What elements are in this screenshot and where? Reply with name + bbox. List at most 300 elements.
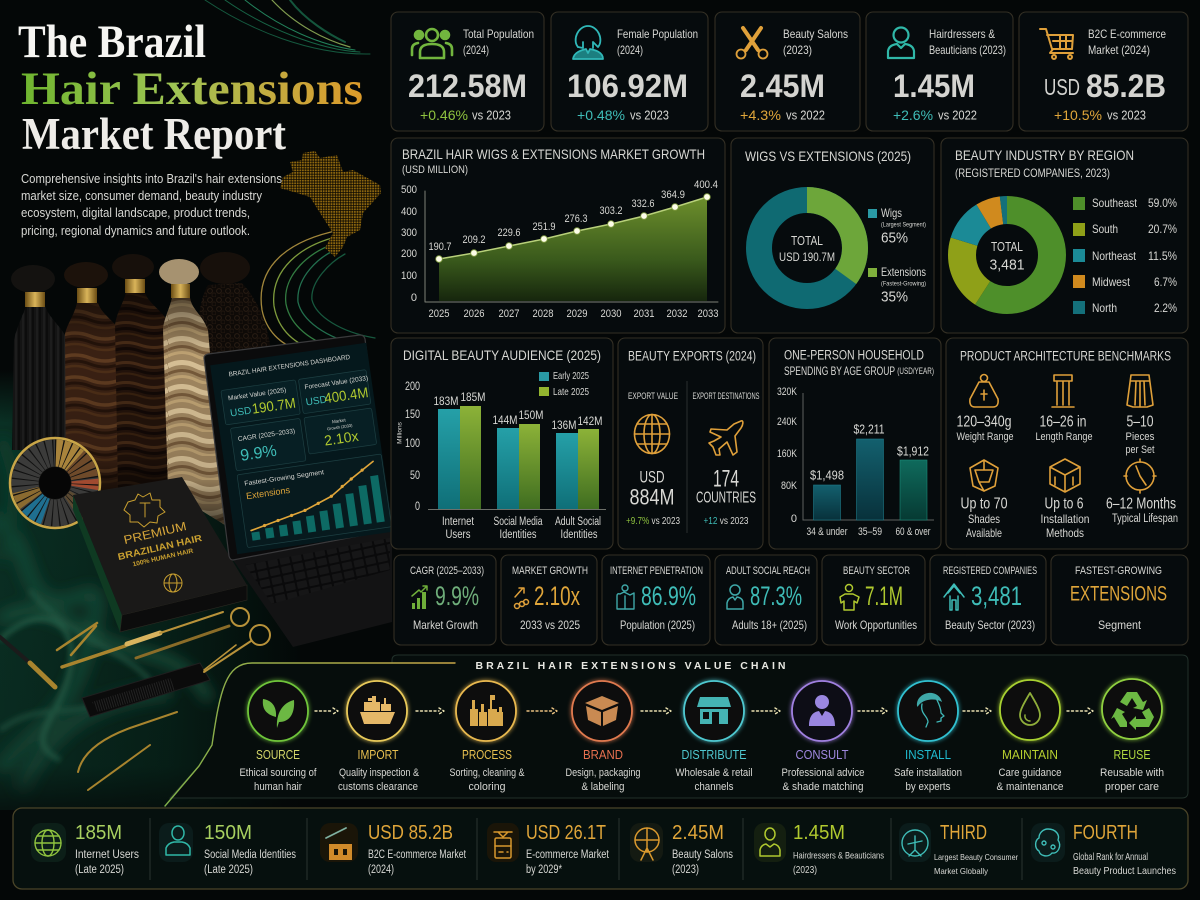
intro paragraph: market size, consumer demand, beauty industry (21, 189, 263, 203)
KPI: Total Population: vs 2023 (472, 108, 511, 122)
area chart: 200 (401, 248, 417, 260)
bar chart: 35–59 (858, 526, 882, 538)
area chart: 251.9 (532, 221, 556, 233)
step: brand: Design, packaging (566, 767, 640, 779)
laptop dashboard screen: Market (332, 417, 347, 424)
stat: beauty sector (822, 555, 925, 645)
panel: value chain (165, 655, 1188, 806)
bar chart: 160K (777, 448, 798, 460)
area chart: 209.2 (462, 234, 486, 246)
step: brand (566, 681, 640, 793)
arrow (752, 708, 780, 714)
arrow (641, 708, 671, 714)
panel: beauty industry by region: (REGISTERED COMPANIES, 2023) (955, 166, 1110, 180)
panel: one-person household: ONE-PERSON HOUSEHOLD (784, 348, 924, 362)
arrow (858, 708, 887, 714)
bar chart: Internet (442, 516, 475, 528)
icon: house (944, 584, 964, 610)
stat: B2C e-commerce market: B2C E-commerce Market (368, 849, 467, 861)
stat: market growth: MARKET GROWTH (512, 565, 588, 577)
benchmark text row 1: 120–340g (956, 414, 1012, 430)
stat: third largest consumer (899, 822, 1018, 876)
icon: growth bars (412, 586, 427, 609)
benchmark text row 2: Up to 70 (960, 496, 1008, 512)
bar chart: 80K (781, 480, 798, 492)
stat: beauty salons: 2.45M (672, 822, 724, 844)
KPI: Hairdressers & Beauticians: Hairdressers & (929, 27, 995, 41)
scissors (204, 625, 270, 672)
stat: market growth: 2.10x (534, 581, 580, 611)
bar chart: 240K (777, 416, 798, 428)
panel: beauty exports: BEAUTY EXPORTS (2024) (628, 348, 756, 364)
icon: worker (840, 584, 859, 610)
step: maintain: & maintenance (996, 781, 1064, 793)
stat: e-commerce market by 2029: E-commerce Market (526, 849, 610, 861)
KPI: Beauty Salons: (2023) (783, 43, 812, 57)
donut chart: TOTAL (791, 234, 823, 248)
donut legend: (Largest Segment) (881, 222, 926, 228)
stat: third largest consumer: THIRD (940, 822, 987, 844)
donut legend: (Fastest-Growing) (881, 280, 926, 288)
laptop dashboard screen: CAGR (2025–2033) (238, 428, 296, 443)
stat: registered companies: 3,481 (971, 581, 1022, 611)
bar chart: 34 & under (806, 526, 848, 538)
KPI: Beauty Salons: Beauty Salons (783, 27, 848, 41)
stat: social media identities: Social Media Identities (204, 849, 296, 861)
benchmark text row 2: Methods (1046, 526, 1084, 540)
arrow (527, 708, 557, 714)
stat: hairdressers and beauticians: Hairdressers & Beauticians (793, 850, 884, 862)
KPI: Female Population: +0.48% (577, 107, 625, 123)
area chart: 300 (401, 227, 417, 239)
benchmark text row 1: 5–10 (1126, 414, 1154, 430)
panel: value chain: BRAZIL HAIR EXTENSIONS VALUE CHAIN (476, 660, 786, 672)
intro paragraph: Comprehensive insights into Brazil's hair extensions (21, 172, 282, 186)
step: reuse: REUSE (1114, 748, 1150, 762)
stat: market growth (501, 555, 597, 645)
stat: fourth global rank: Global Rank for Annual (1073, 851, 1148, 863)
deep brown wavy bundle (112, 254, 175, 490)
step: install: INSTALL (905, 748, 951, 762)
bar chart: Social Media (494, 516, 543, 528)
laptop dashboard screen: Fastest-Growing Segment (244, 469, 325, 488)
KPI: B2C E-commerce: 85.2B (1086, 68, 1166, 104)
stat: internet users: Internet Users (75, 849, 139, 861)
colour swatch wheel (10, 438, 100, 528)
laptop dashboard screen: BRAZIL HAIR EXTENSIONS DASHBOARD (228, 354, 351, 379)
bar chart: 136M (552, 418, 576, 432)
stat: registered companies (930, 555, 1046, 645)
stat: internet users: 185M (75, 822, 122, 844)
stat: social media identities (159, 822, 296, 876)
step: reuse: proper care (1105, 781, 1159, 793)
KPI: Beauty Salons: 2.45M (740, 68, 825, 104)
stat: fastest-growing: Segment (1098, 618, 1142, 632)
area chart: 0 (411, 292, 417, 304)
arrow (963, 708, 991, 714)
stat: internet penetration (602, 555, 710, 645)
box emblem (124, 493, 165, 527)
bar chart: Millions (396, 421, 404, 444)
laptop dashboard screen: USD (305, 395, 328, 409)
step: consult: CONSULT (796, 748, 849, 762)
region legend: Northeast (1092, 249, 1137, 263)
benchmark text row 1: Weight Range (956, 431, 1014, 443)
stat: internet users: (Late 2025) (75, 864, 124, 876)
step: source (240, 681, 317, 793)
laptop dashboard screen: 2.10x (323, 429, 360, 450)
hair clip (57, 623, 97, 655)
gold tool one (62, 608, 249, 667)
icon: hairdresser (888, 28, 914, 58)
KPI: B2C E-commerce: B2C E-commerce (1088, 27, 1166, 41)
panel: beauty exports: USD (640, 468, 664, 486)
bar chart: Users (446, 529, 471, 541)
KPI: Beauty Salons: vs 2022 (786, 108, 825, 122)
bar chart: 144M (492, 413, 518, 427)
stat: CAGR: Market Growth (413, 618, 478, 632)
stat: adult social reach: Adults 18+ (2025) (732, 618, 807, 632)
bar chart: 60 & over (896, 526, 931, 538)
title: Market Report (22, 109, 286, 159)
area chart (401, 179, 718, 320)
region legend: North (1092, 301, 1117, 315)
area chart: 400 (401, 206, 417, 218)
benchmark text row 2 (960, 496, 1178, 540)
stat: registered companies: Beauty Sector (2023) (945, 618, 1035, 632)
step: maintain: Care guidance (998, 767, 1062, 779)
stat: market growth: 2033 vs 2025 (520, 618, 580, 632)
area chart: 229.6 (498, 227, 520, 239)
bar chart (396, 381, 606, 541)
benchmark text row 2: Up to 6 (1044, 496, 1084, 512)
title (18, 16, 363, 159)
step: install (894, 681, 962, 793)
step: process: coloring (468, 781, 506, 793)
benchmark text row 2: Shades (968, 512, 1000, 526)
panel: beauty industry by region (941, 138, 1188, 333)
bar chart: 50 (410, 470, 420, 482)
step: source: Ethical sourcing of (240, 767, 317, 779)
area chart: 2025 (428, 308, 450, 320)
gold hair tools (0, 608, 270, 790)
benchmark text row 1: per Set (1126, 444, 1154, 456)
stat: internet penetration: Population (2025) (620, 618, 695, 632)
step: import: Quality inspection & (339, 767, 420, 779)
step: consult: Professional advice (782, 767, 864, 779)
bottom stats strip (13, 808, 1188, 889)
area chart: 276.3 (564, 213, 588, 225)
panel: beauty exports: EXPORT DESTINATIONS (692, 391, 760, 401)
stat: hairdressers and beauticians (754, 822, 884, 876)
laptop dashboard screen: USD (230, 405, 252, 419)
panel: digital beauty audience: DIGITAL BEAUTY AUDIENCE (2025) (403, 347, 601, 363)
donut legend: Extensions (881, 265, 926, 279)
region legend: South (1092, 222, 1118, 236)
stat: hairdressers and beauticians: 1.45M (793, 822, 845, 844)
panel: market growth chart: BRAZIL HAIR WIGS & EXTENSIONS MARKET GROWTH (402, 146, 705, 162)
donut chart: TOTAL (991, 240, 1023, 254)
title: The Brazil (18, 16, 206, 68)
panel: product architecture benchmarks (946, 338, 1188, 549)
stat: internet penetration: INTERNET PENETRATION (610, 565, 703, 577)
icon: shades gem (970, 460, 998, 491)
KPI: Hairdressers & Beauticians: vs 2022 (938, 108, 977, 122)
bar chart: $1,912 (897, 444, 929, 458)
KPI: B2C E-commerce: +10.5% (1054, 107, 1102, 123)
stat: B2C e-commerce market: (2024) (368, 864, 394, 876)
region legend: 2.2% (1154, 301, 1177, 315)
icon: pieces (1127, 375, 1153, 407)
step: source: human hair (254, 781, 302, 793)
icon: length columns (1052, 375, 1074, 407)
area chart: 2033 (698, 308, 718, 320)
stat: adult social reach (715, 555, 817, 645)
product box: PREMIUM (122, 519, 188, 547)
KPI: Total Population: +0.46% (420, 107, 468, 123)
step: process: Sorting, cleaning & (450, 767, 525, 779)
benchmark text row 1: Pieces (1126, 431, 1155, 443)
bar chart: 142M (578, 414, 602, 428)
legend (539, 370, 589, 398)
step: install: by experts (906, 781, 951, 793)
bar chart: $1,498 (810, 468, 844, 482)
donut chart (962, 210, 1052, 300)
area chart: 364.9 (661, 189, 685, 201)
step: reuse: Reusable with (1100, 767, 1164, 779)
stat: third largest consumer: Largest Beauty Consumer (934, 852, 1018, 862)
icon: globe (634, 414, 670, 454)
stat: third largest consumer: Market Globally (934, 866, 989, 876)
bar chart: 100 (405, 438, 420, 450)
laptop (204, 335, 393, 647)
stat: CAGR: CAGR (2025–2033) (410, 565, 484, 577)
step: source: SOURCE (256, 748, 300, 762)
benchmark text row 1: 16–26 in (1040, 414, 1086, 430)
icon: installation cube (1050, 459, 1080, 492)
panel: one-person household (769, 338, 941, 549)
bar chart: Identities (500, 529, 537, 541)
panel: market growth chart (391, 138, 725, 333)
area chart: 2027 (498, 308, 520, 320)
stat: fourth global rank: Beauty Product Launches (1073, 865, 1176, 877)
KPI: B2C E-commerce (1019, 12, 1188, 131)
intro paragraph: pricing, regional dynamics and future outlook. (21, 224, 250, 238)
donut legend (868, 206, 926, 306)
legend: Late 2025 (553, 386, 589, 398)
panel: beauty exports: 884M (630, 484, 674, 510)
icon: shopping cart (1040, 29, 1073, 59)
step: consult (782, 681, 864, 793)
donut legend: 35% (881, 288, 908, 306)
dark brown wavy bundle (64, 262, 125, 495)
step: process (450, 681, 525, 793)
area chart: 2029 (566, 308, 588, 320)
stat: beauty salons: (2023) (672, 864, 699, 876)
stat: fourth global rank (1031, 822, 1176, 877)
donut legend: Wigs (881, 206, 902, 220)
laptop dashboard screen: 400.4M (323, 385, 369, 407)
stat: e-commerce market by 2029 (487, 822, 610, 876)
area chart: 2028 (532, 308, 554, 320)
product box: 100% HUMAN HAIR (132, 548, 194, 568)
KPI: Beauty Salons: +4.3% (740, 107, 781, 123)
stat: beauty salons: Beauty Salons (672, 849, 733, 861)
stat: adult social reach: 87.3% (750, 581, 802, 611)
KPI: Female Population (551, 12, 708, 131)
laptop dashboard screen: 190.7M (251, 395, 297, 418)
step: brand: & labeling (582, 781, 624, 793)
step: import (338, 681, 420, 793)
bar chart: 200 (405, 381, 420, 393)
stat: adult social reach: ADULT SOCIAL REACH (726, 565, 810, 577)
decorative swirl lines top (205, 0, 370, 54)
region legend (1073, 196, 1177, 315)
icon: scissors (736, 28, 768, 58)
KPI: B2C E-commerce: Market (2024) (1088, 43, 1150, 57)
icon: clock (1124, 459, 1156, 493)
laptop dashboard screen: Growth (2033) (327, 423, 353, 431)
KPI: Female Population: vs 2023 (630, 108, 669, 122)
bar chart: 0 (791, 513, 797, 525)
product box: BRAZILIAN HAIR (117, 533, 203, 563)
benchmark text row 2: Typical Lifespan (1112, 513, 1178, 525)
panel: beauty exports: +9.7% vs 2023 (626, 515, 680, 527)
area chart: 2026 (464, 308, 484, 320)
stat: social media identities: 150M (204, 822, 252, 844)
bar chart (777, 386, 934, 538)
KPI: Total Population: (2024) (463, 43, 489, 57)
area chart: 2032 (666, 308, 688, 320)
bar chart: 183M (434, 394, 458, 408)
stat: internet users (31, 822, 139, 876)
icon: woman (573, 26, 603, 59)
KPI: Hairdressers & Beauticians: Beauticians (2023) (929, 43, 1006, 57)
stat: beauty sector: 7.1M (865, 581, 903, 611)
area chart: 190.7 (428, 241, 452, 253)
curly bundle (198, 252, 272, 372)
KPI: B2C E-commerce: USD (1044, 74, 1080, 100)
stat: B2C e-commerce market: USD 85.2B (368, 822, 453, 844)
panel: market growth chart: (USD MILLION) (402, 164, 468, 176)
panel: wigs vs extensions (731, 138, 934, 333)
KPI: Hairdressers & Beauticians: +2.6% (893, 107, 933, 123)
intro paragraph (21, 172, 282, 238)
benchmark text row 2: Available (966, 526, 1002, 540)
step: import: customs clearance (338, 781, 418, 793)
KPI: Female Population: Female Population (617, 27, 698, 41)
stat: hairdressers and beauticians: (2023) (793, 864, 817, 876)
laptop dashboard screen: Market Value (2025) (228, 387, 287, 402)
bar chart: 150 (405, 409, 420, 421)
panel: beauty exports (618, 338, 763, 549)
intro paragraph: ecosystem, digital landscape, product trends, (21, 206, 250, 220)
step: distribute: Wholesale & retail (676, 767, 752, 779)
laptop dashboard screen: 9.9% (239, 442, 278, 465)
legend: Early 2025 (553, 370, 589, 382)
step: distribute: channels (694, 781, 734, 793)
stat: e-commerce market by 2029: USD 26.1T (526, 822, 606, 844)
panel: wigs vs extensions: WIGS VS EXTENSIONS (2025) (745, 148, 911, 164)
tail comb (0, 637, 30, 663)
donut chart: 3,481 (990, 256, 1024, 274)
stat: beauty sector: BEAUTY SECTOR (843, 565, 910, 577)
icon: people (412, 29, 452, 58)
KPI: Hairdressers & Beauticians (866, 12, 1013, 131)
decorative swirl lines lower (261, 230, 375, 352)
area chart: 303.2 (600, 205, 622, 217)
donut chart: USD 190.7M (779, 250, 835, 264)
stat: fastest-growing: FASTEST-GROWING (1075, 565, 1162, 577)
region legend: Midwest (1092, 275, 1131, 289)
step: import: IMPORT (358, 748, 399, 762)
benchmark text row 1: Length Range (1036, 431, 1092, 443)
step: consult: & shade matching (782, 781, 864, 793)
benchmark text row 1 (956, 414, 1155, 456)
panel: one-person household: SPENDING BY AGE GROUP (USD/YEAR) (784, 364, 934, 378)
region legend: 6.7% (1154, 275, 1177, 289)
stat: internet penetration: 86.9% (641, 581, 696, 611)
bar chart: Identities (560, 529, 598, 541)
blonde wavy bundle (159, 259, 225, 525)
donut legend: 65% (881, 230, 908, 246)
panel: beauty exports: +12 vs 2023 (704, 515, 749, 527)
bar chart: 185M (460, 390, 486, 404)
bar chart: $2,211 (854, 422, 884, 436)
bar chart: 0 (415, 501, 420, 513)
KPI: Beauty Salons (715, 12, 860, 131)
area chart: 400.4 (694, 179, 718, 191)
icon: dotted Brazil map (280, 151, 381, 257)
region legend: Southeast (1092, 196, 1138, 210)
step: distribute (676, 681, 752, 793)
step: brand: BRAND (583, 748, 623, 762)
title: Hair Extensions (21, 63, 363, 115)
step: reuse (1100, 679, 1164, 793)
KPI: Total Population (391, 12, 544, 131)
stat: e-commerce market by 2029: by 2029* (526, 864, 562, 876)
KPI: Total Population: Total Population (463, 27, 534, 41)
arrow (315, 708, 338, 714)
stat: CAGR (394, 555, 496, 645)
bar chart: 150M (518, 408, 544, 422)
icon: people (617, 585, 634, 609)
benchmark text row 2: 6–12 Months (1106, 496, 1176, 512)
background: green silk fabric (0, 370, 300, 810)
panel: beauty exports: 174 (713, 466, 739, 492)
KPI: Hairdressers & Beauticians: 1.45M (893, 68, 975, 104)
hair bundles (11, 252, 272, 525)
stat: beauty salons (630, 822, 733, 876)
step: distribute: DISTRIBUTE (682, 748, 746, 762)
icon: airplane (709, 421, 743, 455)
icon: adult (727, 585, 743, 609)
region legend: 11.5% (1148, 249, 1177, 263)
laptop dashboard screen: Extensions (245, 485, 291, 501)
laptop dashboard screen: Forecast Value (2033) (304, 375, 369, 391)
panel: digital beauty audience (391, 338, 613, 549)
area chart: 100 (401, 270, 417, 282)
black straight bundle (11, 265, 70, 450)
donut chart (759, 200, 855, 296)
icon: rising coins (514, 588, 528, 608)
stat: social media identities: (Late 2025) (204, 864, 253, 876)
step: maintain: MAINTAIN (1002, 748, 1058, 762)
region legend: 59.0% (1148, 196, 1177, 210)
KPI: B2C E-commerce: vs 2023 (1107, 108, 1146, 122)
benchmark text row 2: Installation (1040, 512, 1090, 526)
step: maintain (996, 680, 1064, 793)
